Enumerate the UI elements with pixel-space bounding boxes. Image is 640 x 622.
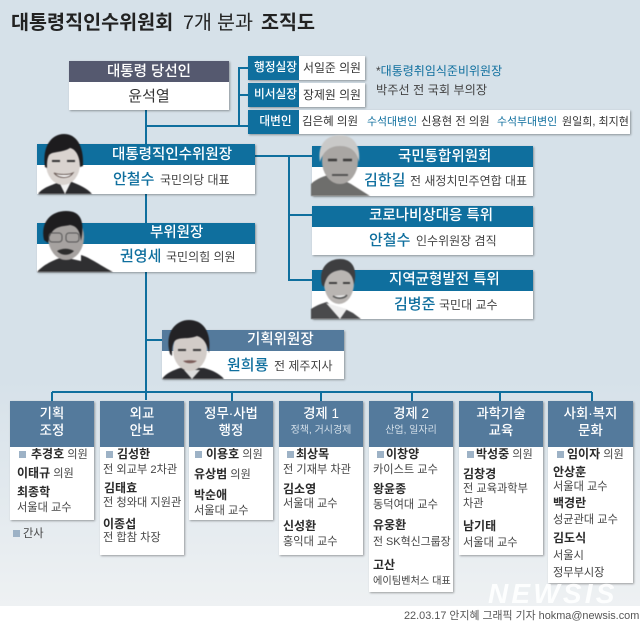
members: 왕윤종 [373, 482, 406, 496]
legend: secretary: 간사 [23, 528, 44, 540]
spokesperson: 김은혜 의원 [302, 116, 358, 128]
photo: Kim Han-gil [310, 134, 370, 197]
title: 분과 [217, 12, 253, 34]
members [194, 447, 263, 517]
members: 김소영 [283, 482, 316, 496]
members: 전 외교부 2차관 [103, 464, 177, 476]
heading: 경제 1 [303, 406, 339, 421]
heading: president-elect [69, 61, 229, 82]
heading: 정무·사법 [204, 406, 258, 421]
inauguration chair: 박주선 전 국회 부의장 [376, 83, 487, 97]
members: 박성중 의원 [476, 447, 533, 461]
name: 안철수 [113, 171, 154, 188]
members: 전 SK혁신그룹장 [373, 536, 451, 548]
label [248, 110, 299, 134]
heading: 경제 2 [393, 406, 429, 421]
members: 서울시 [553, 550, 584, 562]
heading [312, 146, 533, 167]
label: 비서실장 [254, 88, 297, 101]
role: 국민대 교수 [439, 298, 498, 312]
heading [189, 401, 273, 447]
name: 김병준 [394, 296, 435, 313]
credit line: 22.03.17 안지혜 그래픽 기자 hokma@newsis.com [404, 610, 639, 622]
name: 김한길 [364, 172, 405, 189]
panel: president-elect [69, 61, 229, 110]
members: 남기태 [463, 519, 496, 533]
deputy spokesperson title: 수석부대변인 [497, 116, 557, 128]
members: 서울대 교수 [194, 505, 249, 517]
heading: 기획 [40, 406, 64, 421]
members: 이용호 의원 [206, 447, 263, 461]
members: 서울대 교수 [283, 498, 338, 510]
role: 국민의힘 의원 [166, 250, 236, 264]
members: 성균관대 교수 [553, 514, 618, 526]
members [463, 447, 533, 549]
members: 서울대 교수 [17, 502, 72, 514]
panel: COVID response special committee [312, 206, 533, 255]
members: 전 기재부 차관 [283, 464, 351, 476]
members: 임이자 의원 [567, 447, 624, 461]
role: 인수위원장 겸직 [416, 234, 497, 248]
heading [162, 330, 344, 351]
role: 전 새정치민주연합 대표 [410, 174, 527, 188]
members: 이종섭 [103, 517, 136, 531]
heading: 정책, 거시경제 [291, 425, 351, 436]
members: 차관 [463, 498, 484, 510]
role: 국민의당 대표 [160, 173, 230, 187]
legend: secretary [13, 527, 44, 540]
photo: Ahn Cheol-soo [38, 133, 92, 195]
name: Yoon Suk-yeol: 윤석열 [128, 88, 170, 105]
heading: 조정 [40, 423, 64, 438]
heading [312, 206, 533, 227]
members: 이태규 의원 [17, 466, 74, 480]
members: 에이팀벤처스 대표 [373, 576, 451, 587]
panel: secretary [248, 83, 365, 107]
heading [10, 401, 94, 447]
heading [459, 401, 543, 447]
title: 7개 [183, 12, 212, 34]
panel: economy 2 [369, 401, 453, 592]
panel: planning committee chair [162, 330, 344, 379]
title: 조직도 [261, 12, 315, 34]
members: 박순애 [194, 488, 227, 502]
panel: planning and coordination [10, 401, 94, 520]
panel: political and judicial administration [189, 401, 273, 520]
members: 이창양 [386, 447, 419, 461]
members: 서울대 교수 [463, 537, 518, 549]
members: 유상범 의원 [194, 467, 251, 481]
panel: spokespersons [248, 110, 630, 134]
members: 김도식 [553, 531, 586, 545]
title [11, 12, 315, 34]
members: 카이스트 교수 [373, 464, 438, 476]
watermark: NEWSIS: NEWSIS [488, 578, 618, 609]
members: 백경란 [553, 496, 586, 510]
members: 서울대 교수 [553, 481, 608, 493]
heading [100, 401, 184, 447]
panel: chief of staff [248, 56, 365, 80]
heading: 교육 [489, 423, 513, 438]
chief spokesperson: 신용현 전 의원 [421, 116, 490, 128]
members: 고산 [373, 558, 395, 572]
heading: 사회·복지 [564, 406, 617, 421]
photo: Kim Byung-joon [310, 258, 362, 320]
heading [37, 144, 255, 165]
panel: national unity committee [312, 146, 533, 196]
heading: 과학기술 [476, 406, 526, 421]
members: 동덕여대 교수 [373, 499, 438, 511]
heading [37, 223, 255, 244]
heading: 부위원장 [150, 225, 203, 241]
members: 전 청와대 지원관 [103, 497, 181, 509]
label: 행정실장 [254, 61, 297, 74]
name: 원희룡 [227, 357, 268, 374]
heading: 국민통합위원회 [398, 149, 491, 165]
role: 전 제주지사 [274, 359, 333, 373]
name: 안철수 [369, 232, 410, 249]
heading: 산업, 일자리 [385, 425, 437, 436]
members: 김성한 [117, 447, 150, 461]
members: 최종학 [17, 485, 50, 499]
heading: 문화 [578, 423, 603, 438]
name: 서일준 의원 [303, 61, 361, 75]
heading: 지역균형발전 특위 [389, 272, 500, 288]
name: 권영세 [120, 248, 161, 265]
label [248, 83, 299, 107]
label: 대변인 [259, 115, 292, 128]
members: 신성환 [283, 519, 316, 533]
chief spokesperson title: 수석대변인 [367, 116, 417, 128]
panel: social welfare and culture [548, 401, 633, 583]
members: 김태효 [104, 481, 137, 495]
note: inauguration committee [376, 64, 502, 97]
members: 홍익대 교수 [283, 536, 338, 548]
heading: 대통령직인수위원장 [112, 147, 232, 163]
heading: 기획위원장 [247, 332, 314, 348]
panel: vice chair [37, 223, 255, 272]
heading: 행정 [219, 423, 243, 438]
members: 추경호 의원 [31, 447, 88, 461]
members: 안상훈 [553, 465, 586, 479]
heading [312, 270, 533, 291]
heading: 코로나비상대응 특위 [369, 208, 493, 224]
members: 전 합참 차장 [103, 532, 161, 544]
heading [369, 401, 453, 447]
photo: Won Hee-ryong [162, 319, 224, 380]
members [553, 447, 624, 579]
members [373, 447, 451, 587]
heading [279, 401, 363, 447]
heading: 외교 [130, 406, 154, 421]
panel: foreign affairs and security [100, 401, 184, 555]
members [283, 447, 351, 548]
heading [548, 401, 633, 447]
members: 정무부시장 [553, 567, 604, 579]
members [17, 447, 88, 514]
title: 대통령직인수위원회 [11, 12, 173, 34]
deputy spokespersons: 원일희, 최지현 [562, 116, 629, 128]
members [103, 447, 181, 544]
inauguration chair title: *대통령취임식준비위원장 [376, 64, 502, 78]
heading: president-elect: 대통령 당선인 [107, 64, 191, 80]
panel: economy 1 [279, 401, 363, 555]
members: 전 교육과학부 [463, 483, 528, 495]
members: 유웅환 [373, 518, 406, 532]
members: 김창경 [463, 467, 496, 481]
members: 최상목 [296, 447, 329, 461]
photo: Kweon Young-se [36, 210, 113, 273]
label [248, 56, 299, 80]
panel: transition committee chair [37, 144, 255, 194]
panel: science, technology and education [459, 401, 543, 555]
panel: regional balance special committee [312, 270, 533, 319]
heading: 안보 [130, 423, 154, 438]
name: 장제원 의원 [303, 88, 361, 102]
